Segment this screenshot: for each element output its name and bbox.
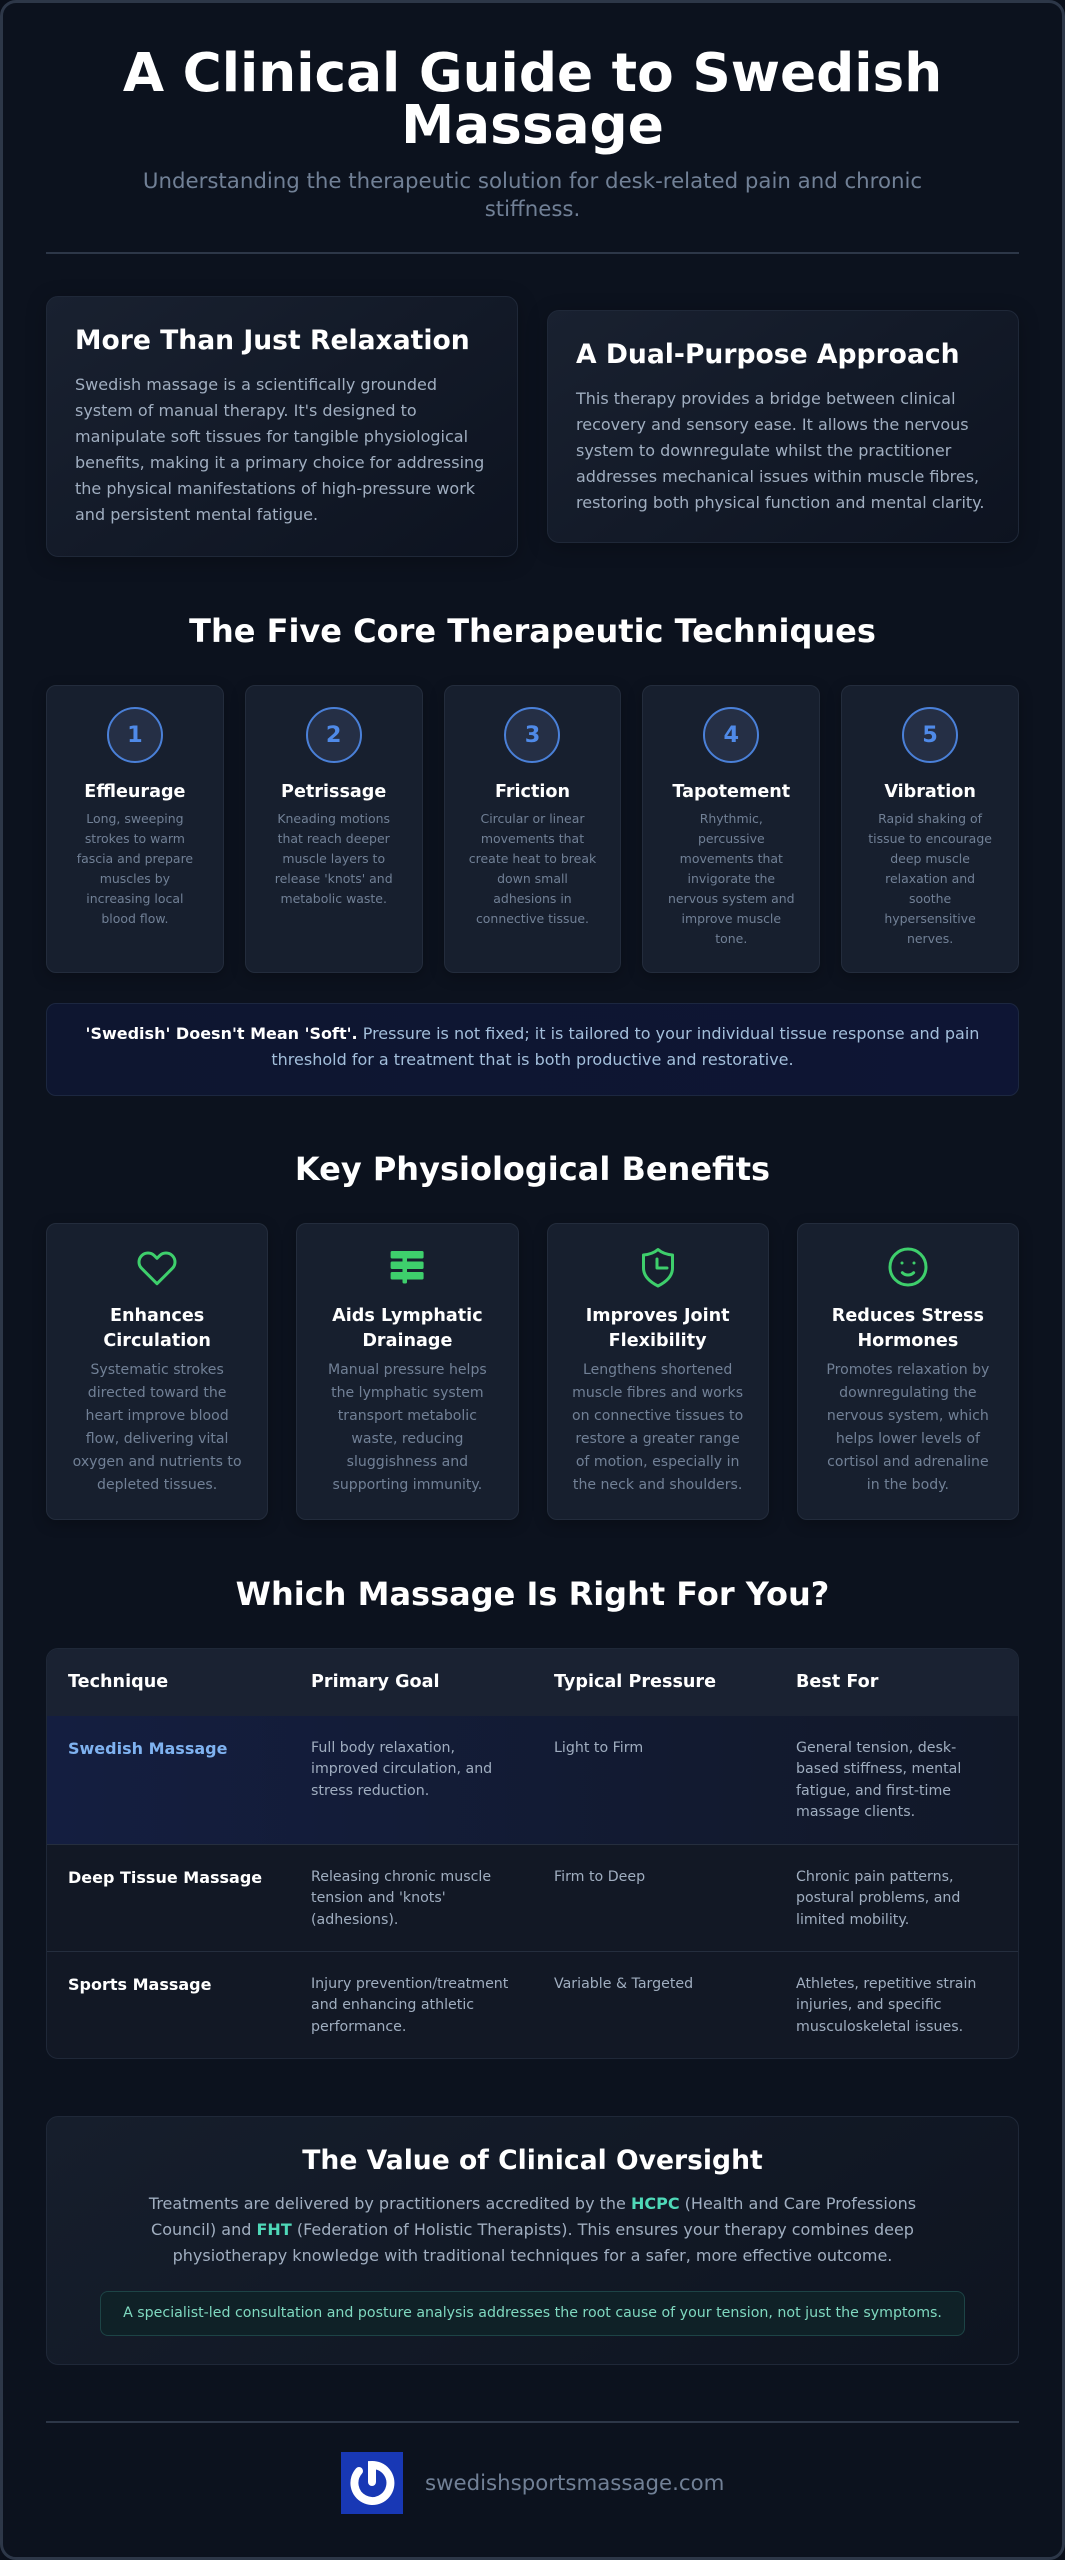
- benefit description: the neck and shoulders.: [573, 1477, 742, 1493]
- heading: more than just relaxation: More Than Just Relaxation: [75, 325, 470, 356]
- benefit name: [586, 1306, 730, 1351]
- row: deep tissue massage: Chronic pain patterns,: [796, 1869, 954, 1885]
- benefit description: the lymphatic system: [331, 1385, 484, 1401]
- technique description: nerves.: [907, 931, 953, 946]
- text: accreditation: Treatments are delivered by practitioners accredited by the HCPC (Health and Care Professions: [149, 2194, 916, 2213]
- technique description: adhesions in: [493, 891, 572, 906]
- heading: which massage: Which Massage Is Right For You?: [236, 1575, 829, 1613]
- row: swedish massage: stress reduction.: [311, 1783, 429, 1799]
- benefit description: of motion, especially in: [576, 1454, 739, 1470]
- number badge 3: [504, 707, 560, 763]
- text: relaxation description: manipulate soft tissues for tangible physiological: [75, 427, 468, 446]
- technique description: deep muscle: [890, 851, 970, 866]
- benefit name: Hormones: [857, 1331, 958, 1351]
- row: deep tissue massage: Releasing chronic muscle: [311, 1869, 491, 1885]
- benefit description: Promotes relaxation by: [826, 1362, 989, 1378]
- benefit description: supporting immunity.: [333, 1477, 482, 1493]
- subtitle: stiffness.: [485, 197, 580, 222]
- row: sports massage: injuries, and specific: [796, 1997, 942, 2013]
- text: accreditation: Council) and FHT (Federation of Holistic Therapists). This ensures your therapy combines deep: [151, 2220, 914, 2239]
- callout: swedish doesn't mean soft: 'Swedish' Doesn't Mean 'Soft'. Pressure is not fixed; it is tailored to your individual tissue response and pain: [86, 1024, 979, 1043]
- row: swedish massage: Full body relaxation,: [311, 1740, 455, 1756]
- card: reduces stress hormones: [797, 1223, 1019, 1520]
- technique description: tissue to encourage: [868, 831, 992, 846]
- row: sports massage: Athletes, repetitive strain: [796, 1976, 976, 1992]
- text: relaxation description: the physical manifestations of high-pressure work: [75, 479, 475, 498]
- number badge 5: 5: [922, 722, 938, 748]
- technique description: blood flow.: [101, 911, 168, 926]
- technique description: connective tissue.: [476, 911, 589, 926]
- text: accreditation: [148, 2194, 916, 2265]
- technique description: soothe: [909, 891, 951, 906]
- row: sports massage: Injury prevention/treatment: [311, 1976, 508, 1992]
- benefit description: heart improve blood: [86, 1408, 229, 1424]
- row: sports massage: Sports Massage: [68, 1975, 211, 1994]
- table header row: Best For: [796, 1672, 878, 1692]
- benefit description: [328, 1362, 487, 1493]
- row: swedish massage: improved circulation, and: [311, 1761, 492, 1777]
- card: vibration: [841, 685, 1019, 973]
- number badge 1: 1: [127, 722, 143, 748]
- heading: key benefits: Key Physiological Benefits: [295, 1150, 770, 1188]
- technique description: percussive: [698, 831, 765, 846]
- row: sports massage: musculoskeletal issues.: [796, 2019, 963, 2035]
- technique name: Tapotement: [672, 782, 790, 802]
- panel: clinical oversight: [46, 2116, 1019, 2365]
- icon: smiley face: [888, 1248, 928, 1286]
- benefit description: Lengthens shortened: [583, 1362, 732, 1378]
- benefit description: transport metabolic: [338, 1408, 477, 1424]
- technique description: Kneading motions: [277, 811, 390, 826]
- row: swedish massage: based stiffness, mental: [796, 1761, 961, 1777]
- row: deep tissue massage: (adhesions).: [311, 1912, 398, 1928]
- row: swedish massage: fatigue, and first-time: [796, 1783, 951, 1799]
- text: relaxation description: Swedish massage is a scientifically grounded: [75, 375, 437, 394]
- callout: root cause: [100, 2291, 965, 2336]
- title: Massage: [401, 94, 664, 156]
- row: deep tissue massage: postural problems, and: [796, 1890, 960, 1906]
- number badge 2: 2: [326, 722, 341, 748]
- heading: clinical oversight: The Value of Clinical Oversight: [302, 2145, 763, 2176]
- benefit name: Aids Lymphatic: [332, 1306, 483, 1326]
- benefit name: Flexibility: [609, 1331, 707, 1351]
- benefit description: nervous system, which: [827, 1408, 989, 1424]
- text: dual-purpose description: recovery and sensory ease. It allows the nervous: [576, 415, 969, 434]
- technique description: invigorate the: [688, 871, 775, 886]
- technique description: increasing local: [86, 891, 183, 906]
- technique description: relaxation and: [885, 871, 975, 886]
- icon: lymphatic bars: [390, 1251, 424, 1284]
- icon: heart: [138, 1252, 176, 1286]
- card: lymphatic drainage: [296, 1223, 518, 1520]
- heading: five core techniques: The Five Core Therapeutic Techniques: [189, 612, 876, 650]
- callout: root cause: A specialist-led consultation and posture analysis addresses the root cause of your tension, not just the symptoms.: [123, 2305, 942, 2321]
- technique description: Long, sweeping: [86, 811, 184, 826]
- number badge 4: 4: [723, 722, 739, 748]
- technique description: [668, 811, 795, 946]
- footer logo: [341, 2452, 403, 2514]
- row: deep tissue massage: [47, 1845, 1020, 1952]
- table header row: Technique: [68, 1672, 168, 1692]
- text: dual-purpose description: [576, 389, 984, 512]
- technique description: improve muscle: [682, 911, 781, 926]
- card: enhances circulation: [46, 1223, 268, 1520]
- benefit description: Systematic strokes: [90, 1362, 224, 1378]
- title: A Clinical Guide to Swedish: [123, 42, 942, 104]
- panel: more than just relaxation: [46, 296, 518, 557]
- benefit description: [572, 1362, 743, 1493]
- number badge 5: [902, 707, 958, 763]
- technique name: Friction: [495, 782, 570, 802]
- benefit description: downregulating the: [839, 1385, 977, 1401]
- benefit description: Manual pressure helps: [328, 1362, 487, 1378]
- benefit description: sluggishness and: [347, 1454, 468, 1470]
- technique description: that reach deeper: [278, 831, 390, 846]
- card: joint flexibility: [546, 1223, 769, 1520]
- technique description: muscle layers to: [282, 851, 385, 866]
- table: massage comparison: [46, 1648, 1019, 2059]
- technique description: Rapid shaking of: [878, 811, 982, 826]
- technique description: tone.: [715, 931, 747, 946]
- technique description: [469, 811, 596, 926]
- row: deep tissue massage: Firm to Deep: [554, 1869, 645, 1885]
- card: petrissage: [245, 685, 423, 973]
- benefit description: depleted tissues.: [97, 1477, 217, 1493]
- benefit name: Circulation: [103, 1331, 211, 1351]
- benefit description: restore a greater range: [575, 1431, 740, 1447]
- table header row: [47, 1649, 1020, 1716]
- benefit description: in the body.: [867, 1477, 949, 1493]
- heading: dual-purpose approach: A Dual-Purpose Approach: [576, 339, 960, 370]
- number badge 4: [703, 707, 759, 763]
- number badge 2: [306, 707, 362, 763]
- row: deep tissue massage: Deep Tissue Massage: [68, 1868, 262, 1887]
- technique description: [275, 811, 393, 906]
- technique description: metabolic waste.: [280, 891, 387, 906]
- subtitle: Understanding the therapeutic solution for desk-related pain and chronic: [143, 169, 922, 194]
- benefit description: on connective tissues to: [572, 1408, 743, 1424]
- benefit name: Reduces Stress: [832, 1306, 984, 1326]
- technique description: muscles by: [100, 871, 170, 886]
- technique name: Effleurage: [84, 782, 186, 802]
- technique description: [868, 811, 992, 946]
- technique description: fascia and prepare: [77, 851, 193, 866]
- technique description: nervous system and: [668, 891, 795, 906]
- technique name: Petrissage: [281, 782, 386, 802]
- benefit description: waste, reducing: [351, 1431, 463, 1447]
- text: relaxation description: [75, 375, 484, 524]
- row: swedish massage: Swedish Massage: [68, 1739, 227, 1758]
- benefit description: oxygen and nutrients to: [73, 1454, 242, 1470]
- row: sports massage: Variable & Targeted: [554, 1976, 693, 1992]
- technique description: Circular or linear: [480, 811, 584, 826]
- benefit name: [332, 1306, 483, 1351]
- technique description: [77, 811, 193, 926]
- text: dual-purpose description: This therapy provides a bridge between clinical: [576, 389, 956, 408]
- row: sports massage: and enhancing athletic: [311, 1997, 474, 2013]
- technique description: down small: [497, 871, 568, 886]
- benefit description: muscle fibres and works: [572, 1385, 743, 1401]
- number badge 3: 3: [525, 722, 540, 748]
- row: swedish massage: Light to Firm: [554, 1740, 643, 1756]
- benefit description: flow, delivering vital: [86, 1431, 228, 1447]
- text: dual-purpose description: system to downregulate whilst the practitioner: [576, 441, 951, 460]
- table header row: Primary Goal: [311, 1672, 440, 1692]
- card: friction: [444, 685, 621, 973]
- benefit description: helps lower levels of: [836, 1431, 980, 1447]
- text: relaxation description: benefits, making it a primary choice for addressing: [75, 453, 484, 472]
- callout: swedish doesn't mean soft: [46, 1003, 1019, 1096]
- table header row: Typical Pressure: [554, 1672, 716, 1692]
- benefit name: [832, 1306, 984, 1351]
- number badge 1: [107, 707, 163, 763]
- row: deep tissue massage: limited mobility.: [796, 1912, 909, 1928]
- technique description: Rhythmic,: [700, 811, 763, 826]
- text: dual-purpose description: addresses mechanical issues within muscle fibres,: [576, 467, 979, 486]
- title: [123, 42, 942, 156]
- card: tapotement: [642, 685, 820, 973]
- technique description: hypersensitive: [884, 911, 976, 926]
- technique name: Vibration: [884, 782, 976, 802]
- benefit description: directed toward the: [88, 1385, 226, 1401]
- benefit description: [826, 1362, 989, 1493]
- technique description: movements that: [481, 831, 584, 846]
- text: relaxation description: system of manual therapy. It's designed to: [75, 401, 417, 420]
- text: relaxation description: and persistent mental fatigue.: [75, 505, 318, 524]
- benefit description: [73, 1362, 242, 1493]
- technique description: movements that: [680, 851, 783, 866]
- subtitle: [143, 169, 922, 222]
- benefit name: Drainage: [362, 1331, 452, 1351]
- row: sports massage: performance.: [311, 2019, 406, 2035]
- technique description: release 'knots' and: [275, 871, 393, 886]
- panel: dual-purpose approach: [547, 310, 1019, 543]
- benefit description: cortisol and adrenaline: [827, 1454, 989, 1470]
- benefit name: [103, 1306, 211, 1351]
- callout: swedish doesn't mean soft: threshold for a treatment that is both productive and restorative.: [271, 1050, 794, 1069]
- row: deep tissue massage: tension and 'knots': [311, 1890, 446, 1906]
- benefit name: Enhances: [110, 1306, 204, 1326]
- footer url: swedishsportsmassage.com: [425, 2471, 724, 2496]
- row: sports massage: [68, 1975, 976, 2035]
- card: effleurage: [46, 685, 224, 973]
- icon: shield with clock: [642, 1248, 674, 1288]
- row: swedish massage: [47, 1716, 1020, 1845]
- technique description: create heat to break: [469, 851, 596, 866]
- technique description: strokes to warm: [85, 831, 185, 846]
- row: swedish massage: General tension, desk-: [796, 1740, 956, 1756]
- row: swedish massage: massage clients.: [796, 1804, 915, 1820]
- text: dual-purpose description: restoring both physical function and mental clarity.: [576, 493, 984, 512]
- text: accreditation: physiotherapy knowledge with traditional techniques for a safer, more effective outcome.: [173, 2246, 892, 2265]
- benefit name: Improves Joint: [586, 1306, 730, 1326]
